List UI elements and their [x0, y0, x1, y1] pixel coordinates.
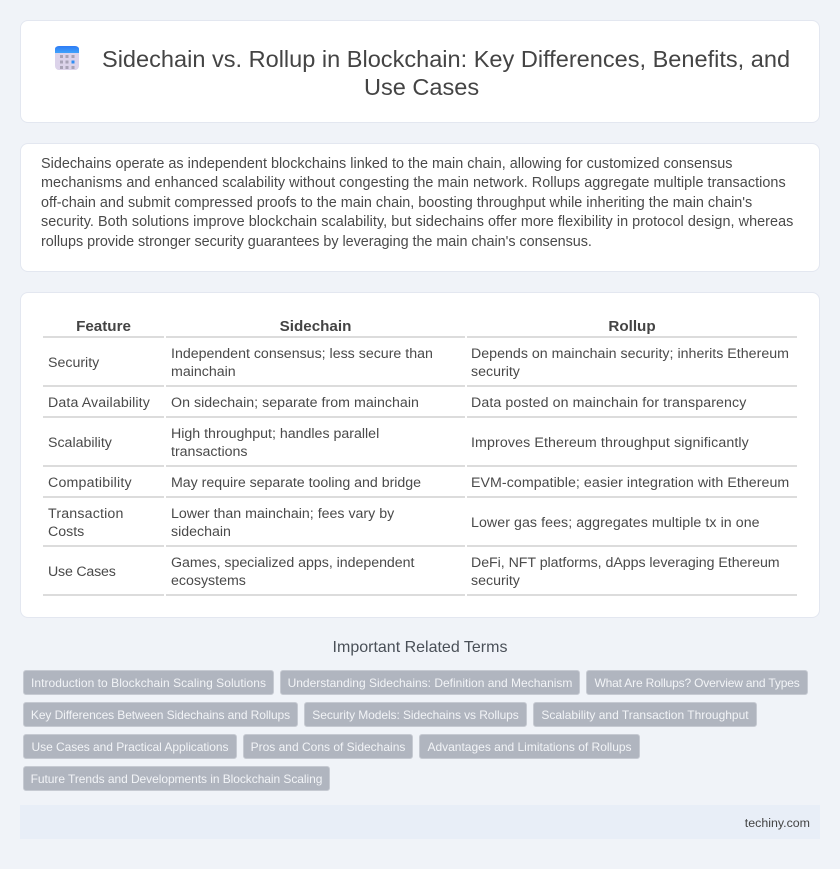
title: Use Cases [364, 74, 479, 100]
row: scalability: Improves Ethereum throughput significantly [471, 435, 749, 451]
row: scalability: High throughput; handles parallel [171, 426, 379, 442]
chip: Understanding Sidechains: Definition and Mechanism [288, 676, 572, 690]
chip: Pros and Cons of Sidechains [251, 740, 405, 754]
text block: description: off-chain and submit compressed proofs to the main chain, boosting throughput while inheriting the main chain's [41, 194, 752, 210]
chip: Use Cases and Practical Applications [32, 740, 228, 754]
title: Sidechain vs. Rollup in Blockchain: Key Differences, Benefits, and [102, 46, 790, 72]
heading: related terms: Important Related Terms [333, 639, 507, 656]
row: use cases: Use Cases [48, 564, 116, 580]
footer bar [20, 805, 820, 839]
row: data availability: On sidechain; separate from mainchain [171, 395, 419, 411]
row: transaction costs: Transaction [48, 506, 124, 522]
row: use cases: Games, specialized apps, independent [171, 555, 414, 571]
chip [533, 702, 757, 727]
row: use cases: ecosystems [171, 573, 246, 589]
row: scalability: transactions [171, 444, 248, 460]
chip [23, 702, 298, 727]
row: security: mainchain [171, 364, 236, 380]
row: security: Security [48, 355, 99, 371]
row: security: Depends on mainchain security; inherits Ethereum [471, 346, 789, 362]
comparison table [43, 318, 797, 596]
row: data availability [48, 395, 746, 411]
table header: Rollup [608, 318, 656, 335]
chip [304, 702, 527, 727]
panel: comparison table [20, 292, 820, 618]
chip: Scalability and Transaction Throughput [541, 708, 749, 722]
text block: description [41, 156, 793, 250]
panel: description [20, 143, 820, 272]
row: use cases: DeFi, NFT platforms, dApps leveraging Ethereum [471, 555, 780, 571]
row: data availability: Data posted on mainchain for transparency [471, 395, 746, 411]
chip [243, 734, 413, 759]
chip [23, 734, 237, 759]
row: security: security [471, 364, 520, 380]
row: use cases: security [471, 573, 520, 589]
chip: Introduction to Blockchain Scaling Solutions [31, 676, 266, 690]
row: security: Independent consensus; less secure than [171, 346, 433, 362]
chip [280, 670, 580, 695]
text block: description: security. Both solutions improve blockchain scalability, but sidechains offer more flexibility in protocol design, whereas [41, 214, 793, 230]
table header [76, 318, 656, 335]
chip: Future Trends and Developments in Blockchain Scaling [31, 772, 322, 786]
row: scalability [48, 426, 749, 460]
row: transaction costs: sidechain [171, 524, 231, 540]
chip: Key Differences Between Sidechains and Rollups [31, 708, 290, 722]
title [102, 46, 790, 100]
chip [23, 766, 330, 791]
row: compatibility [48, 475, 789, 491]
row: transaction costs: Costs [48, 524, 84, 540]
icon: calendar [55, 46, 79, 70]
table header: Feature [76, 318, 131, 335]
chip: Security Models: Sidechains vs Rollups [312, 708, 519, 722]
table header: Sidechain [280, 318, 351, 335]
row: scalability: Scalability [48, 435, 112, 451]
row: use cases [48, 555, 780, 589]
text block: description: Sidechains operate as independent blockchains linked to the main chain, allowing for customized consensus [41, 156, 732, 172]
row: compatibility: May require separate tooling and bridge [171, 475, 421, 491]
chip: What Are Rollups? Overview and Types [594, 676, 800, 690]
row: transaction costs: Lower gas fees; aggregates multiple tx in one [471, 515, 760, 531]
text block: description: rollups provide stronger security guarantees by leveraging the main chain's consensus. [41, 234, 592, 250]
row: transaction costs: Lower than mainchain; fees vary by [171, 506, 394, 522]
footer text: techiny.com [745, 816, 810, 830]
row: compatibility: EVM-compatible; easier integration with Ethereum [471, 475, 789, 491]
chip: Advantages and Limitations of Rollups [427, 740, 632, 754]
related term chips [23, 670, 808, 791]
text block: description: mechanisms and enhanced scalability without congesting the main network. Rollups aggregate multiple transactions [41, 175, 786, 191]
row: transaction costs [48, 506, 760, 540]
row: data availability: Data Availability [48, 395, 150, 411]
chip [419, 734, 640, 759]
chip [23, 670, 274, 695]
row: compatibility: Compatibility [48, 475, 132, 491]
chip [586, 670, 808, 695]
row: security [48, 346, 789, 380]
panel: title card [20, 20, 820, 123]
